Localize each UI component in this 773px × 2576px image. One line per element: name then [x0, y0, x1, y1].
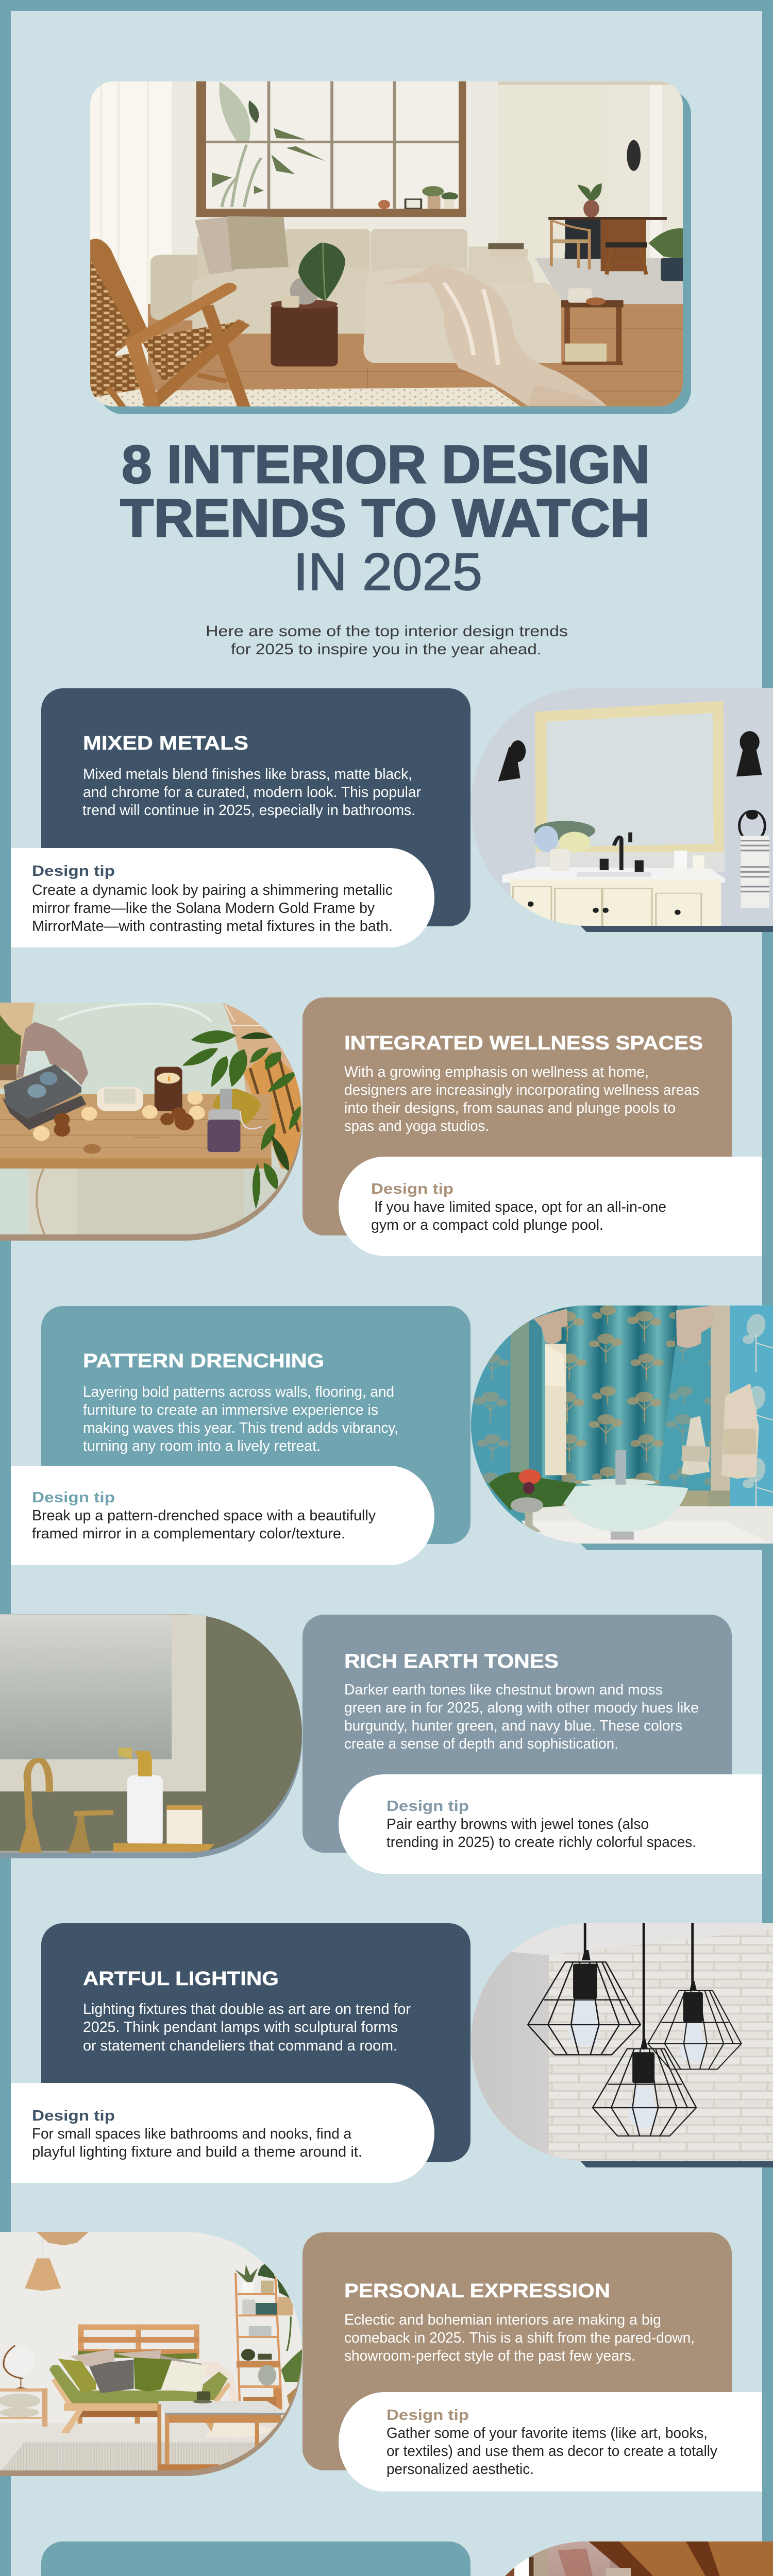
card heading: MIXED METALS: [83, 733, 248, 754]
card heading: ARTFUL LIGHTING: [83, 1968, 279, 1990]
intro text: Here are some of the top interior design trends: [206, 623, 568, 640]
design tip callout: Design tip: [386, 1798, 469, 1815]
card body text: green are in for 2025, along with other moody hues like: [344, 1700, 699, 1716]
card body text: and chrome for a curated, modern look. This popular: [83, 784, 421, 801]
card background: [303, 1615, 732, 1853]
card body text: create a sense of depth and sophistication.: [344, 1736, 618, 1752]
hero image shadow: [98, 90, 691, 414]
card body text: trend will continue in 2025, especially in bathrooms.: [82, 802, 415, 819]
design tip callout: mirror frame—like the Solana Modern Gold Frame by: [32, 900, 375, 917]
panel: accent ceilings: [11, 2540, 773, 2576]
panel: mixed metals: [11, 680, 773, 947]
design tip callout: Gather some of your favorite items (like art, books,: [386, 2425, 708, 2442]
photo: modern living room with beige sectional: [90, 81, 683, 406]
photo: black wire cage pendant lights: [471, 1919, 773, 2173]
design tip callout: Create a dynamic look by pairing a shimmering metallic: [32, 882, 393, 899]
design tip callout: personalized aesthetic.: [386, 2461, 534, 2478]
card background: [303, 997, 732, 1235]
card body text: [344, 1064, 699, 1134]
design tip callout: playful lighting fixture and build a theme around it.: [32, 2144, 362, 2160]
design tip callout: If you have limited space, opt for an all-in-one: [374, 1199, 666, 1215]
panel: rich earth tones: [0, 1612, 762, 1874]
intro text: for 2025 to inspire you in the year ahead.: [231, 641, 542, 658]
design tip callout: gym or a compact cold plunge pool.: [371, 1217, 603, 1233]
card body text: Eclectic and bohemian interiors are making a big: [344, 2312, 661, 2328]
panel: personal expression: [0, 2231, 762, 2492]
card background: [41, 688, 470, 926]
card body text: Mixed metals blend finishes like brass, matte black,: [83, 766, 412, 783]
card body text: [83, 2001, 411, 2054]
design tip callout: [11, 848, 434, 947]
panel: pattern drenching: [11, 1303, 773, 1565]
design tip callout: [11, 2083, 434, 2183]
card body text: spas and yoga studios.: [344, 1118, 489, 1134]
design tip callout: [339, 1774, 762, 1874]
card body text: or statement chandeliers that command a room.: [83, 2038, 397, 2054]
card body text: showroom-perfect style of the past few years.: [344, 2348, 635, 2364]
image shadow: [471, 694, 773, 932]
design tip callout: Design tip: [32, 863, 115, 879]
image shadow: [0, 1122, 302, 1241]
card body text: [82, 766, 421, 819]
card body text: 2025. Think pendant lamps with sculptural forms: [83, 2019, 398, 2036]
card background: [41, 2541, 470, 2576]
card body text: into their designs, from saunas and plunge pools to: [344, 1100, 676, 1116]
design tip callout: [339, 1157, 762, 1256]
photo: wood ceiling and botanical mural: [471, 2540, 773, 2576]
card body text: comeback in 2025. This is a shift from the pared-down,: [344, 2330, 695, 2346]
design tip callout: Break up a pattern-drenched space with a beautifully: [32, 1507, 376, 1524]
title: 8 INTERIOR DESIGN: [122, 435, 650, 495]
design tip callout: For small spaces like bathrooms and nooks, find a: [32, 2126, 352, 2142]
card body text: furniture to create an immersive experience is: [83, 1402, 378, 1418]
card background: [41, 1306, 470, 1544]
title: TRENDS TO WATCH: [120, 488, 650, 548]
card heading: INTEGRATED WELLNESS SPACES: [344, 1032, 703, 1054]
panel: artful lighting: [11, 1919, 773, 2183]
panel: integrated wellness spaces: [0, 997, 762, 1256]
card background: [303, 2232, 732, 2470]
card body text: [344, 2312, 695, 2364]
image shadow: [471, 1929, 773, 2167]
card body text: turning any room into a lively retreat.: [83, 1438, 321, 1454]
design tip callout: MirrorMate—with contrasting metal fixtures in the bath.: [32, 918, 393, 935]
photo: bathroom with gold mirror: [471, 688, 773, 926]
image shadow: [0, 2357, 302, 2476]
design tip callout: Design tip: [371, 1181, 453, 1197]
intro text: [206, 623, 568, 658]
card body text: Lighting fixtures that double as art are on trend for: [83, 2001, 411, 2018]
design tip callout: or textiles) and use them as decor to create a totally: [386, 2443, 717, 2460]
card body text: designers are increasingly incorporating wellness areas: [344, 1082, 699, 1098]
photo: bath caddy with candles: [0, 999, 310, 1243]
image shadow: [0, 1739, 302, 1858]
design tip callout: trending in 2025) to create richly colorful spaces.: [386, 1834, 696, 1851]
image shadow: [471, 2548, 773, 2576]
design tip callout: Design tip: [32, 2108, 115, 2124]
title: [120, 435, 650, 601]
design tip callout: Design tip: [386, 2407, 469, 2424]
photo: olive wall with gold faucet: [0, 1612, 321, 1861]
card body text: Layering bold patterns across walls, flooring, and: [83, 1384, 394, 1400]
title: IN 2025: [293, 543, 482, 601]
photo: boho living room with green sofa: [0, 2231, 310, 2478]
card body text: [83, 1384, 398, 1454]
card background: [41, 1923, 470, 2162]
card body text: burgundy, hunter green, and navy blue. These colors: [344, 1718, 682, 1734]
design tip callout: [11, 1466, 434, 1565]
card heading: PATTERN DRENCHING: [83, 1350, 324, 1372]
card body text: With a growing emphasis on wellness at home,: [344, 1064, 649, 1080]
design tip callout: [339, 2392, 762, 2492]
photo: teal floral wallpaper powder room: [471, 1303, 773, 1552]
card body text: [344, 1682, 699, 1752]
design tip callout: framed mirror in a complementary color/texture.: [32, 1526, 345, 1542]
design tip callout: Pair earthy browns with jewel tones (also: [386, 1816, 649, 1833]
card heading: PERSONAL EXPRESSION: [344, 2280, 610, 2302]
image shadow: [471, 1312, 773, 1550]
card body text: Darker earth tones like chestnut brown and moss: [344, 1682, 663, 1698]
hero image panel: [90, 81, 691, 414]
card body text: making waves this year. This trend adds vibrancy,: [83, 1420, 398, 1436]
card heading: RICH EARTH TONES: [344, 1651, 559, 1672]
design tip callout: Design tip: [32, 1489, 115, 1506]
